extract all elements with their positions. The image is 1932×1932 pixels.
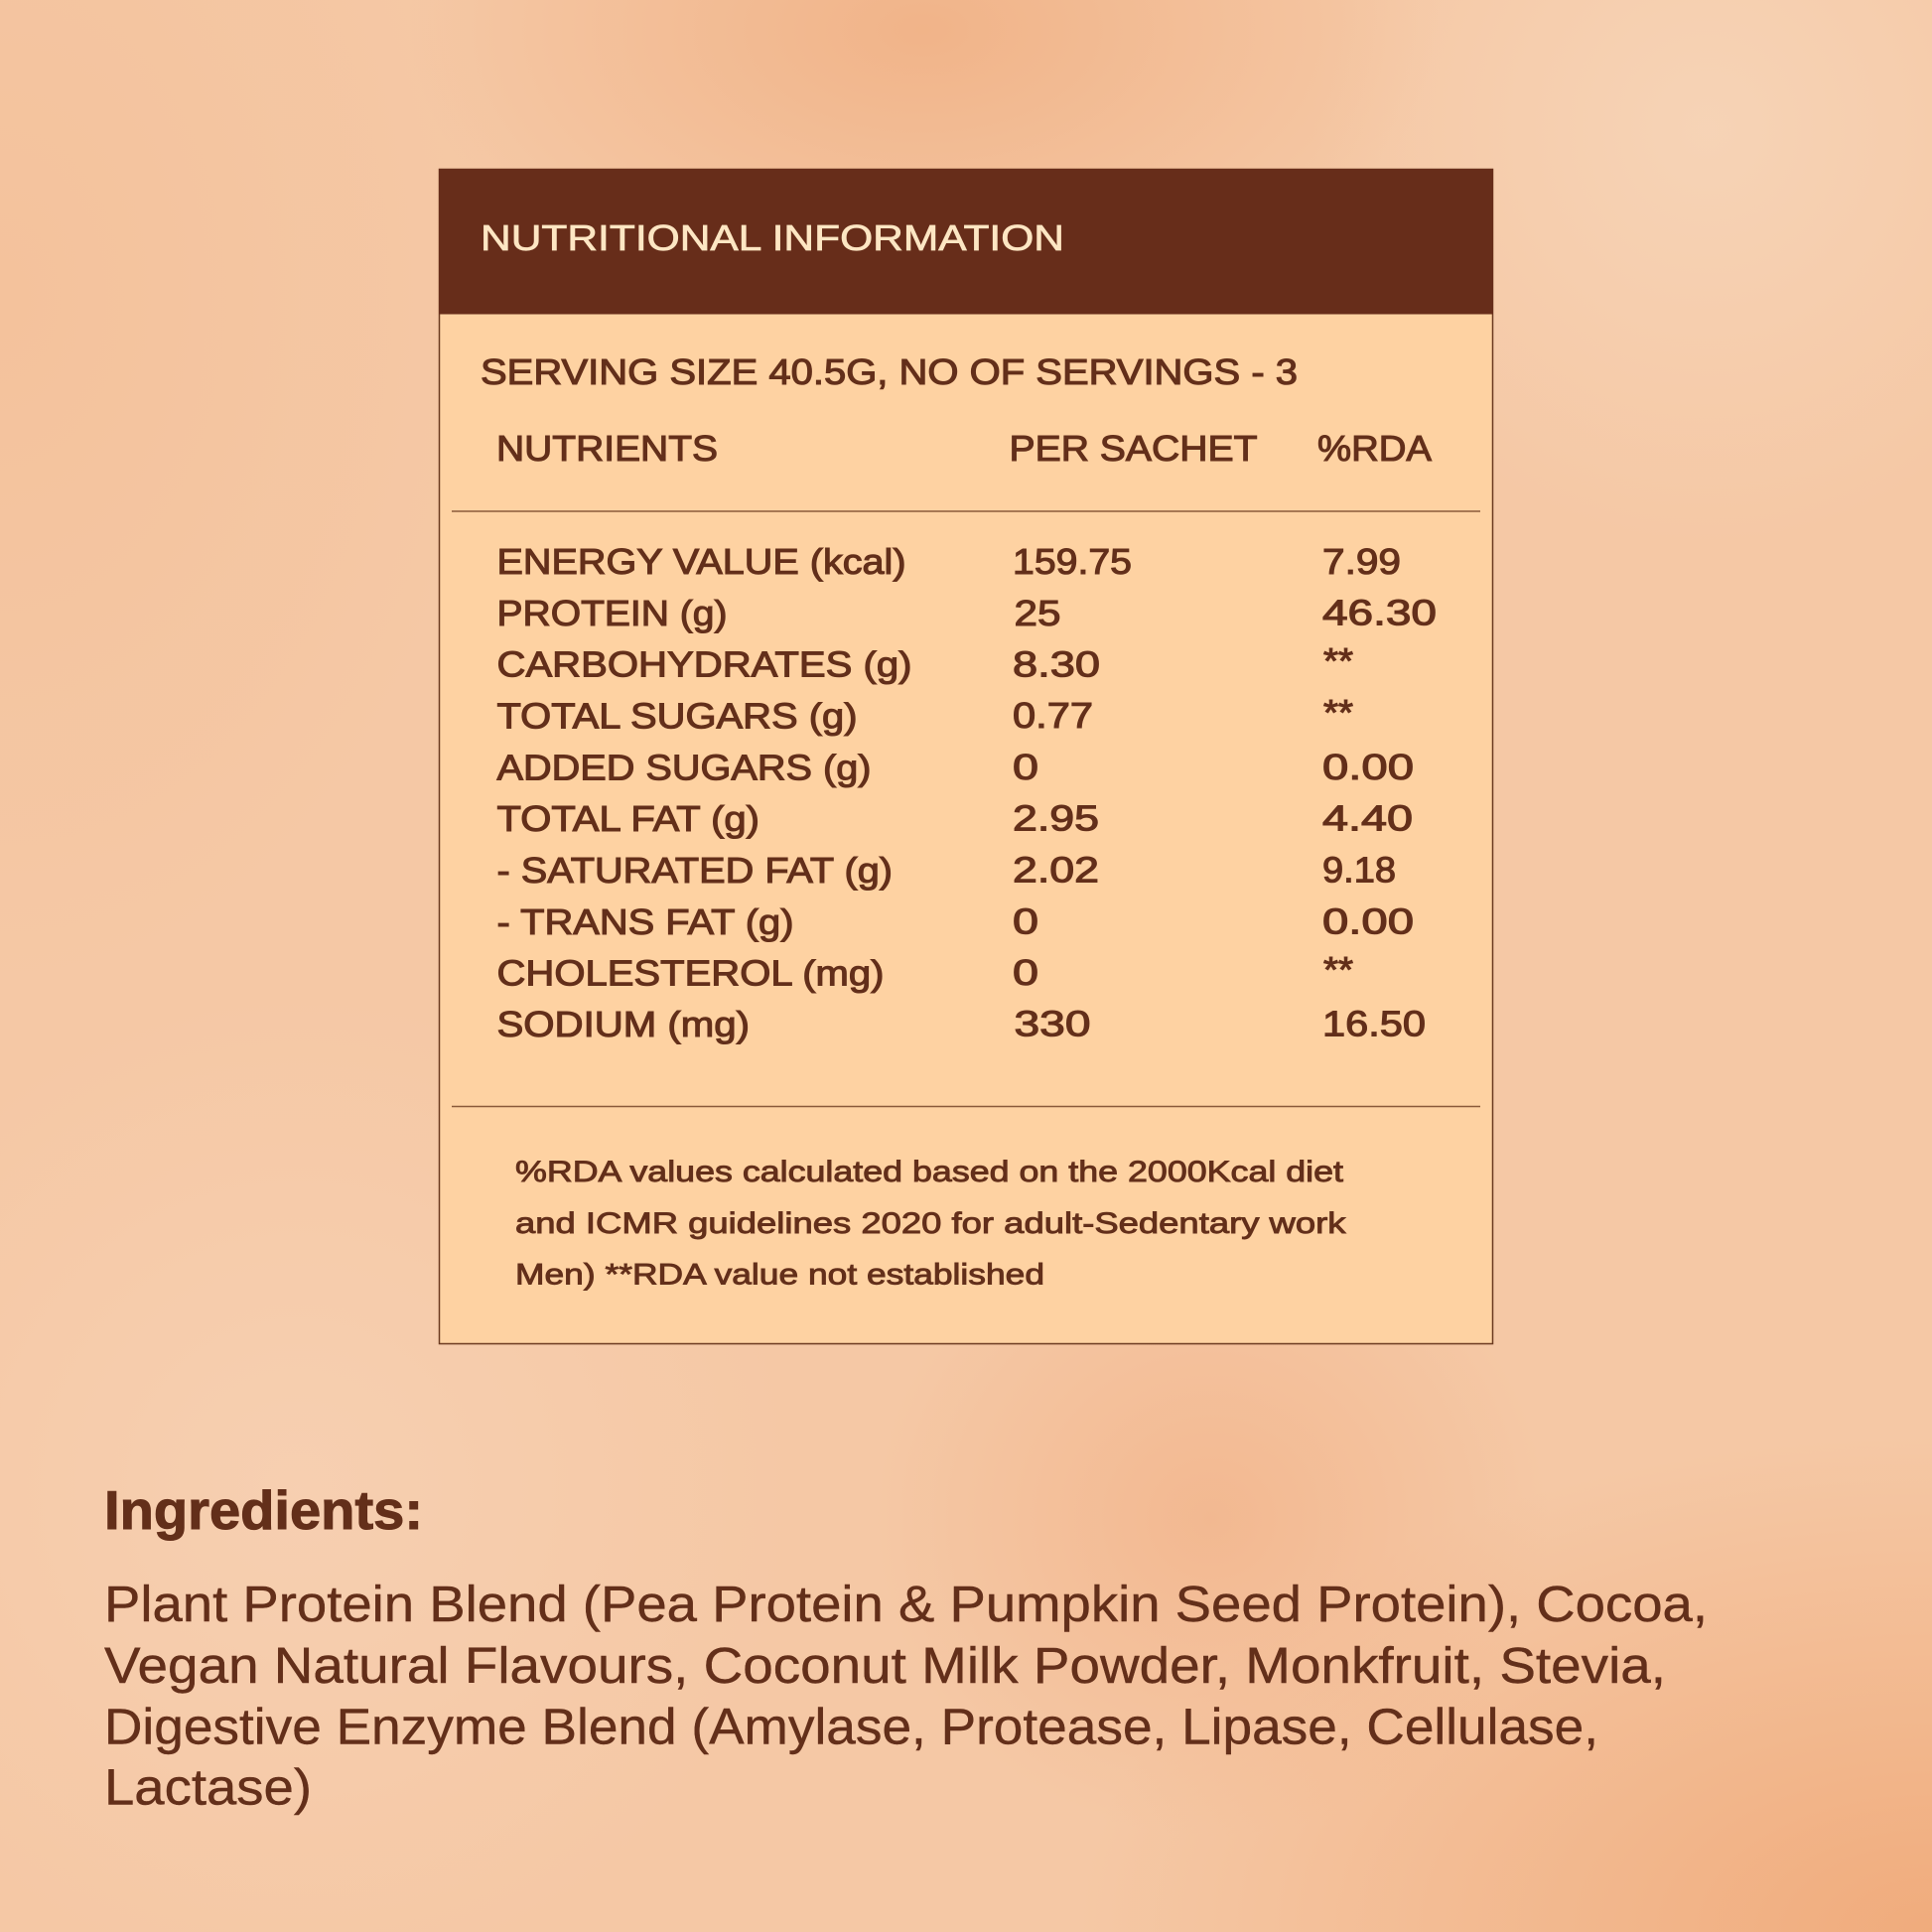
row: carbohydrates <box>496 640 1353 685</box>
row: total fat <box>496 798 1413 839</box>
row: added sugars: 0.00 <box>1322 747 1414 787</box>
row: carbohydrates: 8.30 <box>1013 643 1100 685</box>
row: energy value <box>496 541 1401 582</box>
row: sodium: 16.50 <box>1322 1003 1426 1044</box>
row: energy value: 7.99 <box>1322 541 1401 582</box>
row: trans fat: - TRANS FAT (g) <box>496 901 794 942</box>
nutrient rows <box>496 541 1437 1044</box>
row: total sugars: TOTAL SUGARS (g) <box>496 695 858 737</box>
row: cholesterol: ** <box>1323 949 1353 990</box>
row: added sugars <box>496 747 1414 788</box>
row: total sugars <box>496 692 1353 737</box>
row: carbohydrates: CARBOHYDRATES (g) <box>496 643 911 685</box>
row: sodium: SODIUM (mg) <box>496 1004 750 1044</box>
text block: ingredients list: Vegan Natural Flavours, Coconut Milk Powder, Monkfruit, Stevia, <box>104 1637 1666 1694</box>
text block: ingredients list <box>104 1576 1708 1815</box>
row: protein <box>496 592 1437 633</box>
row: cholesterol: CHOLESTEROL (mg) <box>496 953 884 993</box>
row: total fat: 2.95 <box>1013 798 1099 838</box>
row: protein: PROTEIN (g) <box>496 593 727 633</box>
row: energy value: ENERGY VALUE (kcal) <box>496 541 905 582</box>
row: total fat: 4.40 <box>1322 798 1413 838</box>
column headings <box>496 428 1432 469</box>
serving size line: SERVING SIZE 40.5G, NO OF SERVINGS - 3 <box>481 351 1298 392</box>
row: energy value: 159.75 <box>1013 541 1132 582</box>
row: protein: 25 <box>1015 593 1060 633</box>
footnote: RDA note: %RDA values calculated based on the 2000Kcal diet <box>515 1156 1344 1188</box>
row: total sugars: ** <box>1323 692 1353 733</box>
row: saturated fat: - SATURATED FAT (g) <box>496 850 893 891</box>
row: protein: 46.30 <box>1322 592 1437 633</box>
row: saturated fat: 9.18 <box>1322 850 1396 890</box>
footnote: RDA note: Men) **RDA value not established <box>515 1259 1044 1291</box>
text block: ingredients list: Digestive Enzyme Blend (Amylase, Protease, Lipase, Cellulase, <box>104 1698 1598 1755</box>
row: trans fat: 0 <box>1013 901 1038 941</box>
row: trans fat <box>496 901 1414 942</box>
text block: ingredients list: Plant Protein Blend (Pea Protein & Pumpkin Seed Protein), Cocoa, <box>104 1576 1708 1632</box>
row: sodium <box>496 1003 1426 1044</box>
panel: nutrition table <box>439 169 1493 1344</box>
heading: ingredients: Ingredients: <box>104 1479 423 1541</box>
footnote: RDA note: and ICMR guidelines 2020 for adult-Sedentary work <box>515 1207 1347 1240</box>
column headings: %RDA <box>1317 428 1432 469</box>
row: cholesterol <box>496 949 1353 993</box>
row: added sugars: ADDED SUGARS (g) <box>496 747 872 788</box>
heading: nutritional information: NUTRITIONAL INFORMATION <box>481 217 1064 258</box>
row: saturated fat <box>496 850 1396 891</box>
text block: ingredients list: Lactase) <box>104 1759 312 1815</box>
table header band <box>439 169 1493 314</box>
row: added sugars: 0 <box>1013 747 1038 787</box>
row: cholesterol: 0 <box>1013 952 1038 993</box>
row: total sugars: 0.77 <box>1013 695 1093 736</box>
row: saturated fat: 2.02 <box>1013 850 1099 890</box>
row: trans fat: 0.00 <box>1322 901 1414 941</box>
column headings: PER SACHET <box>1009 428 1258 469</box>
column headings: NUTRIENTS <box>496 428 718 469</box>
row: sodium: 330 <box>1015 1003 1090 1044</box>
footnote: RDA note <box>515 1156 1347 1291</box>
row: carbohydrates: ** <box>1323 640 1353 681</box>
row: total fat: TOTAL FAT (g) <box>496 798 759 839</box>
